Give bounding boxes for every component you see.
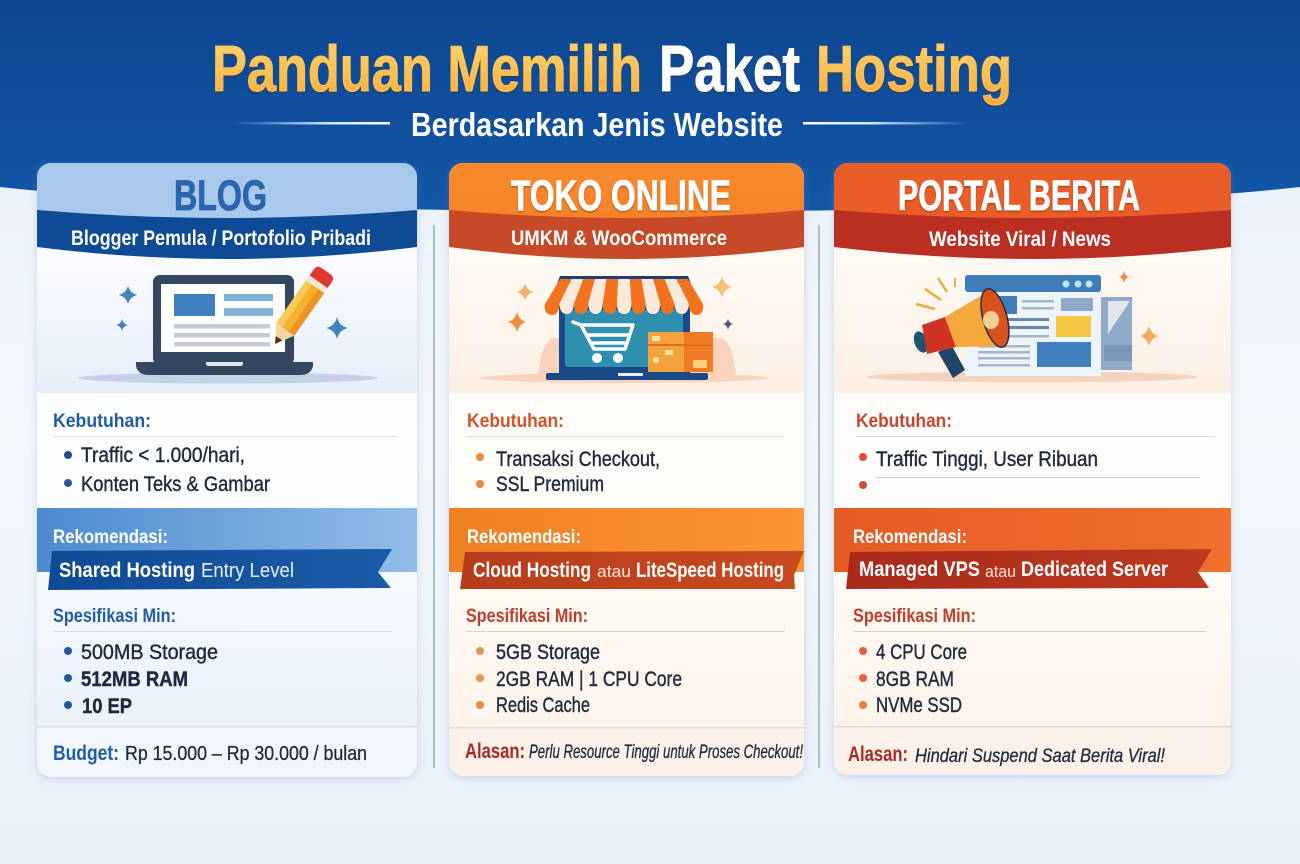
alasan portal: Alasan: [848,743,908,766]
section: rekomendasi portal: Dedicated Server [1021,558,1168,581]
section: spesifikasi toko: 2GB RAM | 1 CPU Core [496,668,682,691]
section: rekomendasi portal [846,527,1212,589]
heading: toko online: TOKO ONLINE [511,172,731,220]
title: Hosting [816,32,1012,105]
section: rekomendasi toko: Rekomendasi: [467,527,581,548]
subheading: portal berita: Website Viral / News [929,228,1111,251]
title: Panduan Memilih [212,32,642,105]
section: spesifikasi portal: 8GB RAM [876,668,954,691]
section: spesifikasi portal: Spesifikasi Min: [853,606,976,627]
section: rekomendasi toko: LiteSpeed Hosting [636,559,784,582]
heading: blog: BLOG [174,172,267,220]
section: spesifikasi portal [853,606,1206,717]
budget blog: Budget: [53,742,119,765]
section: kebutuhan portal [856,411,1215,489]
panel: toko online [449,163,804,778]
section: rekomendasi portal: Managed VPS [859,558,980,581]
section: rekomendasi toko: Cloud Hosting [473,559,591,582]
section: spesifikasi blog: 500MB Storage [81,641,218,664]
subtitle: Berdasarkan Jenis Website [411,106,783,143]
section: kebutuhan toko: SSL Premium [496,473,604,496]
section: spesifikasi portal: 4 CPU Core [876,641,967,664]
heading: portal berita: PORTAL BERITA [898,172,1140,220]
section: spesifikasi blog: 512MB RAM [81,668,188,691]
panel: blog [37,163,417,778]
section: spesifikasi blog: Spesifikasi Min: [53,606,176,627]
alasan toko: Alasan: [465,740,525,763]
section: kebutuhan blog: Traffic < 1.000/hari, [81,444,245,467]
section: spesifikasi portal: NVMe SSD [876,694,962,717]
budget blog [53,742,367,765]
panel: portal berita [834,163,1231,778]
alasan portal: Hindari Suspend Saat Berita Viral! [915,746,1166,767]
icon: laptop with pencil [78,265,378,384]
section: kebutuhan portal: Traffic Tinggi, User Ribuan [876,448,1098,471]
section: rekomendasi portal: Rekomendasi: [853,527,967,548]
section: spesifikasi blog: 10 EP [82,695,132,718]
section: rekomendasi blog: Rekomendasi: [53,527,168,548]
section: kebutuhan blog [53,411,397,496]
section: spesifikasi toko [466,606,785,717]
section: kebutuhan toko: Kebutuhan: [467,411,564,432]
section: kebutuhan portal: Kebutuhan: [856,411,952,432]
title [212,32,1012,105]
alasan toko [465,740,803,763]
section: kebutuhan toko: Transaksi Checkout, [496,448,660,471]
section: spesifikasi toko: Redis Cache [496,694,590,717]
section: spesifikasi blog [53,606,392,718]
section: rekomendasi blog: Shared Hosting [59,559,195,582]
section: kebutuhan toko [467,411,785,496]
section: spesifikasi toko: Spesifikasi Min: [466,606,588,627]
section: rekomendasi portal: atau [985,562,1016,581]
subheading: toko online: UMKM & WooCommerce [511,227,727,250]
section: rekomendasi blog [48,527,392,590]
column dividers [433,225,820,768]
section: rekomendasi toko: atau [597,562,631,581]
section: rekomendasi toko [460,527,804,589]
icon: storefront with cart and boxes [480,276,768,383]
icon: megaphone with news page [867,271,1197,382]
section: spesifikasi toko: 5GB Storage [496,641,600,664]
title: Paket [659,32,800,105]
budget blog: Rp 15.000 – Rp 30.000 / bulan [125,743,367,765]
section: kebutuhan blog: Kebutuhan: [53,411,151,432]
section: rekomendasi blog: Entry Level [201,560,294,582]
subheading: blog: Blogger Pemula / Portofolio Pribadi [71,227,371,250]
alasan toko: Perlu Resource Tinggi untuk Proses Checkout! [529,742,803,763]
section: kebutuhan blog: Konten Teks & Gambar [81,473,270,496]
alasan portal [848,743,1166,767]
